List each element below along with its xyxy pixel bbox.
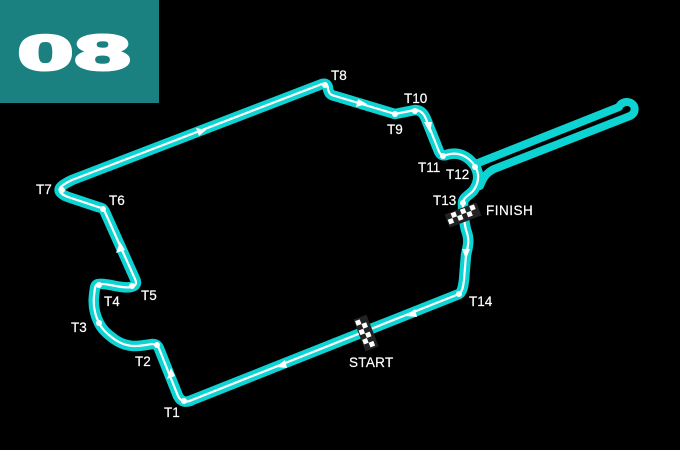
turn labels: T10 [404, 91, 427, 106]
turn labels: T12 [446, 167, 469, 182]
track outline [60, 84, 478, 402]
label: start: START [349, 355, 394, 370]
turn labels: T11 [418, 160, 440, 175]
turn labels: T8 [331, 68, 347, 83]
direction arrows [116, 99, 470, 379]
turn labels: T6 [109, 193, 125, 208]
badge: round number 08 [0, 0, 159, 103]
turn labels: T4 [104, 294, 120, 309]
turn labels: T13 [433, 193, 456, 208]
finish flag [445, 202, 481, 228]
turn labels: T7 [36, 182, 52, 197]
pit lane [478, 102, 635, 186]
start flag [353, 315, 379, 351]
turn labels: T2 [135, 354, 151, 369]
turn labels: T14 [469, 294, 493, 309]
turn markers [59, 82, 478, 404]
turn labels: T3 [71, 320, 87, 335]
turn labels: T5 [141, 288, 157, 303]
label: finish: FINISH [486, 203, 533, 218]
turn labels: T9 [387, 122, 403, 137]
badge: round number 08: 08 [18, 25, 132, 80]
track centre line [60, 84, 478, 402]
turn labels [36, 68, 493, 420]
turn labels: T1 [164, 405, 180, 420]
